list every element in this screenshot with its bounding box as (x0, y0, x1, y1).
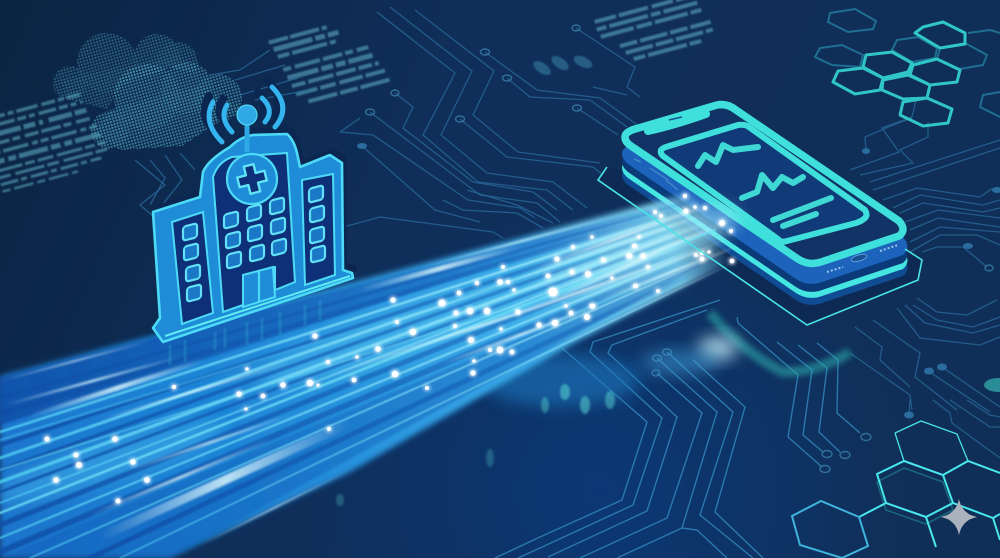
phone top face (625, 105, 903, 263)
icon: back data cloud (53, 33, 200, 110)
icon: watermark sparkle (941, 499, 977, 535)
circuit traces: top centre (340, 7, 640, 238)
central panel (213, 153, 295, 312)
beam soft highlights (0, 190, 748, 516)
port and speaker holes (634, 159, 898, 272)
phone bottom layer (622, 140, 908, 305)
data stream beam (0, 190, 748, 558)
building depth shadow (157, 127, 357, 335)
left wing panel (172, 212, 213, 324)
hexagon cluster: top right (815, 9, 1000, 126)
phone on hexagonal platform (598, 105, 922, 325)
base strip (165, 276, 350, 336)
glowing data particles (44, 194, 734, 504)
icon: front data cloud (91, 62, 242, 150)
hexagon cluster: bottom right (792, 421, 1000, 558)
circuit traces: bottom centre (495, 300, 871, 558)
circuit traces: right of phone (850, 100, 1000, 458)
medical cross badge (227, 154, 277, 204)
data text panel: left (0, 91, 111, 192)
icon: hospital building with antenna (153, 81, 357, 342)
platform base (598, 167, 922, 325)
circuit traces: traces feeding down from behind the hospital (135, 118, 360, 235)
data text panel: top centre-right (595, 0, 715, 66)
inner screen card (661, 125, 866, 242)
antenna with signal waves (205, 81, 283, 152)
pale bright streaks (0, 205, 740, 545)
platform edge line crossing the beam (598, 167, 922, 325)
right wing panel (302, 174, 335, 285)
beam lower dark band (0, 262, 700, 558)
notch and speaker (648, 114, 706, 131)
small data blocks (531, 53, 594, 78)
reflection of the phone on the board (336, 313, 850, 506)
windows (183, 185, 325, 302)
heartbeat lines (698, 145, 831, 226)
beam glow body (0, 193, 738, 558)
beam dark top band (0, 196, 700, 425)
building frame (153, 134, 353, 342)
door (243, 267, 275, 307)
hospital reflection on the beam (170, 300, 320, 365)
data text panel: top left near clouds (210, 15, 389, 107)
long light streaks (0, 199, 735, 558)
